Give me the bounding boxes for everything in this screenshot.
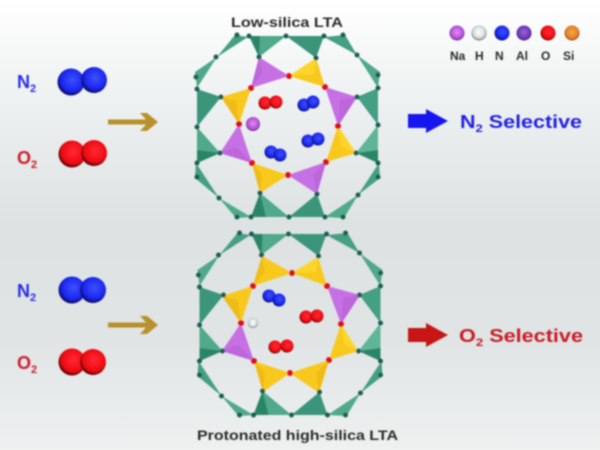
label: N2 Selective: N	[460, 112, 473, 132]
row: bottom N2 molecule with label: N	[17, 281, 30, 301]
label: N2 Selective: Selective	[483, 112, 582, 132]
label: N2 Selective: 2	[476, 123, 483, 135]
arrow: blue N2 selective	[408, 109, 448, 133]
framework: protonated high-silica LTA	[196, 230, 383, 418]
legend: atom types	[450, 26, 580, 63]
row: top O2 molecule with label: 2	[31, 159, 37, 171]
red oxygen nodes	[236, 73, 341, 178]
row: top O2 molecule with label	[17, 140, 107, 171]
row: bottom N2 molecule with label: 2	[30, 292, 36, 304]
adsorbed molecules	[246, 96, 324, 162]
row: bottom O2 molecule with label: 2	[31, 364, 37, 376]
legend: atom types: O	[541, 49, 550, 63]
legend: atom types: Si	[563, 49, 574, 63]
row: bottom O2 molecule with label	[17, 348, 106, 376]
row: top O2 molecule with label: O	[17, 148, 31, 168]
dark oxygen nodes	[194, 32, 380, 220]
label: O2 Selective: O	[459, 326, 473, 346]
title: Low-silica LTA: Low-silica LTA	[231, 14, 343, 30]
legend: atom types: Al	[516, 49, 528, 63]
row: top N2 molecule with label: 2	[30, 83, 36, 95]
adsorbed molecules	[248, 290, 324, 354]
title: Protonated high-silica LTA: Protonated high-silica LTA	[197, 427, 398, 443]
label: O2 Selective: Selective	[483, 326, 583, 346]
green outer framework	[195, 35, 380, 218]
legend: atom types: Na	[450, 49, 466, 63]
arrow: top gold arrow	[108, 113, 158, 131]
arrow: red O2 selective	[408, 323, 448, 347]
arrow: bottom gold arrow	[108, 316, 158, 334]
purple and yellow tetrahedra	[220, 57, 357, 194]
row: top N2 molecule with label	[17, 67, 107, 96]
green outer framework	[198, 233, 382, 416]
dark oxygen nodes	[196, 230, 383, 418]
legend: atom types: N	[495, 49, 504, 63]
label: O2 Selective: 2	[476, 337, 483, 349]
row: bottom O2 molecule with label: O	[17, 353, 31, 373]
row: top N2 molecule with label: N	[17, 72, 30, 92]
red oxygen nodes	[238, 270, 344, 376]
framework: low-silica LTA	[194, 32, 380, 220]
row: bottom N2 molecule with label	[17, 276, 106, 304]
purple and yellow tetrahedra	[222, 256, 360, 393]
legend: atom types: H	[475, 49, 484, 63]
